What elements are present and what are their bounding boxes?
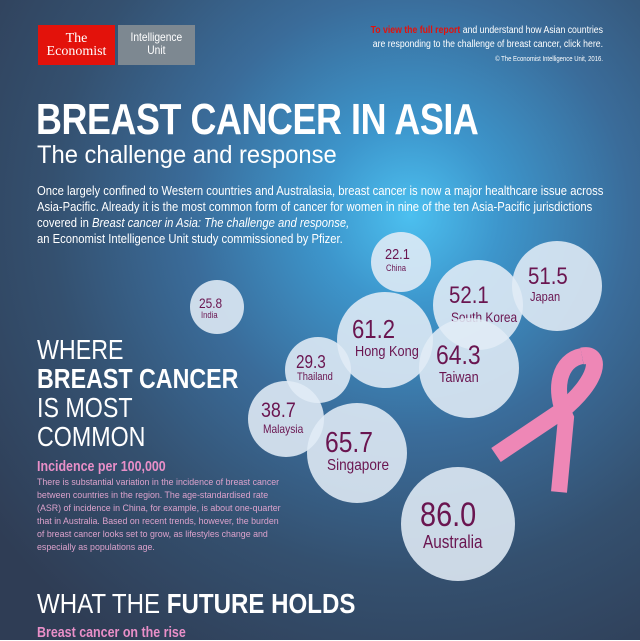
- intro text: covered in Breast cancer in Asia: The challenge and response,: [37, 216, 349, 230]
- bubble: Hong Kong: 61.2: [352, 314, 395, 344]
- intro text: Asia-Pacific. Already it is the most common form of cancer for women in nine of the ten Asia-Pacific jurisdictions: [37, 200, 592, 214]
- intro text: [37, 184, 603, 246]
- bubble: Singapore: [307, 403, 407, 503]
- link text: are responding to the challenge of breast cancer, click here.: [373, 39, 603, 50]
- heading: where breast cancer is most common: IS MOST: [37, 392, 133, 423]
- intro text: an Economist Intelligence Unit study commissioned by Pfizer.: [37, 232, 343, 246]
- logo: The Economist: [38, 25, 115, 65]
- body text: (ASR) of incidence in China, for example, is about one-quarter: [37, 503, 281, 514]
- subheading: incidence: Incidence per 100,000: [37, 458, 166, 475]
- bubble: Malaysia: 38.7: [261, 399, 296, 422]
- bubble: Singapore: Singapore: [327, 457, 389, 474]
- bubble: India: India: [201, 310, 218, 320]
- body text: between countries in the region. The age-standardised rate: [37, 490, 268, 501]
- bubble: Thailand: Thailand: [297, 371, 333, 383]
- body text: [37, 477, 281, 553]
- bubble: China: [371, 232, 431, 292]
- link text: To view the full report and understand how Asian countries: [371, 25, 603, 36]
- bubble: Taiwan: Taiwan: [439, 369, 479, 386]
- body text: that in Australia. Based on recent trends, however, the burden: [37, 516, 279, 527]
- bubble: Japan: Japan: [530, 289, 560, 304]
- copyright: © The Economist Intelligence Unit, 2016.: [495, 56, 603, 63]
- bubble: Malaysia: Malaysia: [263, 422, 303, 436]
- bubble: Taiwan: 64.3: [436, 340, 481, 370]
- bubble: Australia: Australia: [423, 532, 483, 552]
- heading: where breast cancer is most common: [37, 334, 238, 452]
- bubble: Malaysia: [248, 381, 324, 457]
- body text: especially as populations age.: [37, 542, 155, 553]
- bubble: South Korea: South Korea: [451, 309, 517, 325]
- bubble: Hong Kong: [337, 292, 433, 388]
- logo: Intelligence Unit: Intelligence: [131, 30, 182, 44]
- bubble: China: 22.1: [385, 246, 410, 263]
- bubble: India: [190, 280, 244, 334]
- body text: There is substantial variation in the incidence of breast cancer: [37, 477, 279, 488]
- bubble: Japan: [512, 241, 602, 331]
- bubble: India: 25.8: [199, 295, 222, 311]
- bubble: Thailand: [285, 337, 351, 403]
- logo: The Economist: The: [66, 31, 87, 46]
- bubble: Japan: 51.5: [528, 263, 568, 290]
- heading: what the future holds: WHAT THE FUTURE HOLDS: [37, 588, 355, 619]
- intro text: Once largely confined to Western countries and Australasia, breast cancer is now a major healthcare issue across: [37, 184, 603, 198]
- bubble: Australia: [401, 467, 515, 581]
- heading: where breast cancer is most common: WHERE: [37, 334, 124, 365]
- logo: The Economist: Economist: [47, 44, 106, 59]
- link text: [370, 25, 603, 50]
- bubble: Thailand: 29.3: [296, 352, 326, 372]
- heading: where breast cancer is most common: BREAST CANCER: [37, 363, 238, 394]
- body text: of breast cancer looks set to grow, as lifestyles change and: [37, 529, 268, 540]
- bubble: Australia: 86.0: [420, 496, 476, 534]
- bubble: Taiwan: [419, 318, 519, 418]
- subheading: breast cancer on the rise: Breast cancer on the rise: [37, 624, 186, 641]
- bubble: China: China: [386, 263, 406, 273]
- subtitle: The challenge and response: [37, 141, 337, 169]
- heading: where breast cancer is most common: COMMON: [37, 421, 145, 452]
- bubble: South Korea: 52.1: [449, 282, 489, 309]
- logo: Intelligence Unit: Unit: [147, 43, 166, 57]
- bubble: Hong Kong: Hong Kong: [355, 343, 419, 360]
- title: BREAST CANCER IN ASIA: [36, 95, 478, 144]
- bubble: Singapore: 65.7: [325, 427, 373, 459]
- bubble: South Korea: [433, 260, 523, 350]
- logo: Intelligence Unit: [118, 25, 195, 65]
